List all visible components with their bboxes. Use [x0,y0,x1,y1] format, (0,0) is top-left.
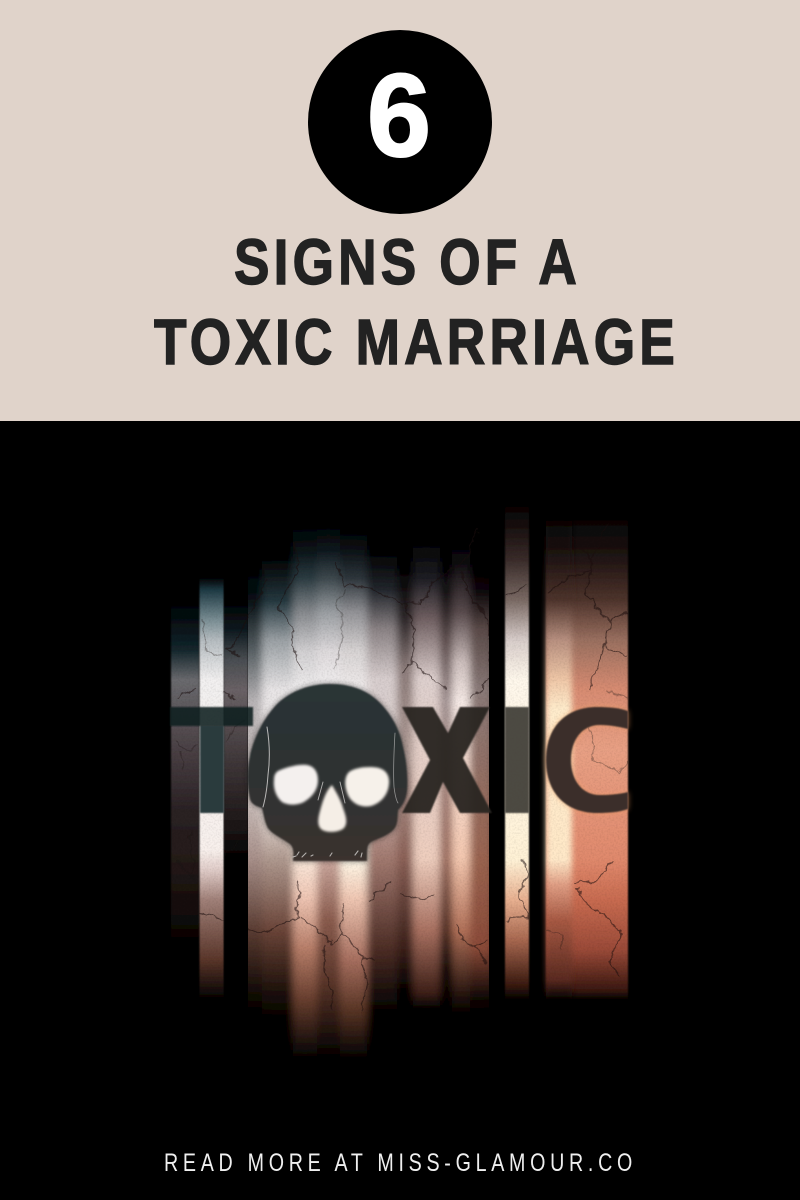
word: TOXIC with skull replacing O [170,707,628,813]
column: orange strip [546,500,628,1000]
skull: bone highlights and teeth [263,727,398,857]
column: right bright strip [505,500,529,1000]
column: left bright strip [200,500,224,1000]
letter C [546,707,628,813]
footer link text: READ MORE AT MISS-GLAMOUR.CO [164,1149,637,1177]
icon: skull [248,684,407,861]
column: central glow with soft stripes [248,528,489,1056]
column: left outer grey strip [171,500,199,1000]
number badge: 6 in black circle [308,30,492,214]
backdrop: striped light columns [171,500,628,1060]
skull: eye and nose highlights [274,765,389,832]
panel: title header [0,0,800,421]
letter X [402,707,492,813]
title line 2: TOXIC MARRIAGE [154,306,679,378]
title line 1: SIGNS OF A [234,226,581,298]
column: left dark strip [224,500,248,1000]
texture: grain and cracks [176,528,628,1013]
letter I [505,707,529,813]
letter T [170,707,253,813]
number badge: 6 in black circle: 6 [367,50,431,182]
panel: toxic skull artwork and footer [166,507,632,1171]
